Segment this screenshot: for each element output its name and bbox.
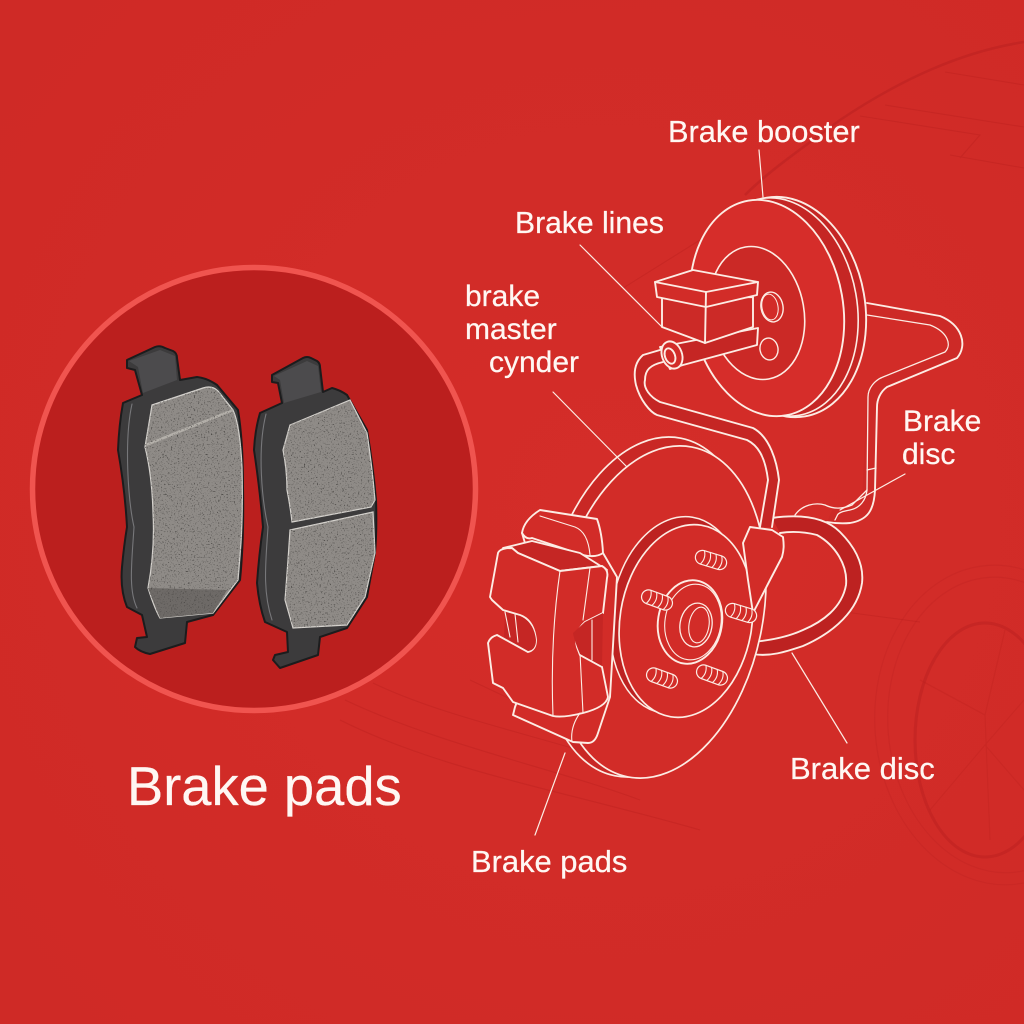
left brake line (635, 350, 779, 527)
master cylinder (655, 270, 758, 372)
label: Brake booster: Brake booster (668, 114, 860, 149)
curved strap (752, 516, 862, 655)
label: brake master cylinder: cynder (489, 346, 579, 379)
title: Brake pads: Brake pads (127, 756, 402, 817)
diagram: brake system (488, 150, 962, 835)
icon: left brake pad (118, 346, 250, 654)
label: Brake disc upper: disc (902, 438, 955, 471)
label: brake master cylinder (465, 280, 579, 379)
leader: upper brake disc (840, 474, 905, 510)
cylinder barrel (660, 328, 758, 369)
rotor (514, 419, 782, 795)
leader: brake pads (535, 753, 565, 835)
label: Brake pads lower: Brake pads (471, 844, 627, 879)
leader: master cylinder (553, 392, 627, 467)
bracket (743, 527, 784, 613)
leader: brake booster (759, 150, 763, 197)
reservoir (662, 297, 753, 343)
hub plate (596, 507, 758, 723)
label: Brake disc upper: Brake (903, 405, 981, 438)
brake caliper (488, 510, 617, 743)
label: brake master cylinder: brake (465, 280, 540, 313)
faint car sketch (340, 42, 1024, 895)
label: Brake disc lower: Brake disc (790, 751, 935, 786)
brake booster (673, 184, 883, 430)
panel: brake pads circle (32, 268, 476, 710)
icon: right brake pad (254, 357, 380, 668)
hub (652, 576, 728, 668)
leader: brake lines (580, 245, 662, 327)
label: Brake disc upper (902, 405, 981, 471)
label: Brake lines: Brake lines (515, 207, 664, 240)
brake disc assembly (488, 350, 862, 797)
right brake line (795, 303, 962, 523)
wheel studs (640, 549, 758, 690)
leader: lower brake disc (792, 653, 847, 743)
label: brake master cylinder: master (465, 313, 557, 346)
